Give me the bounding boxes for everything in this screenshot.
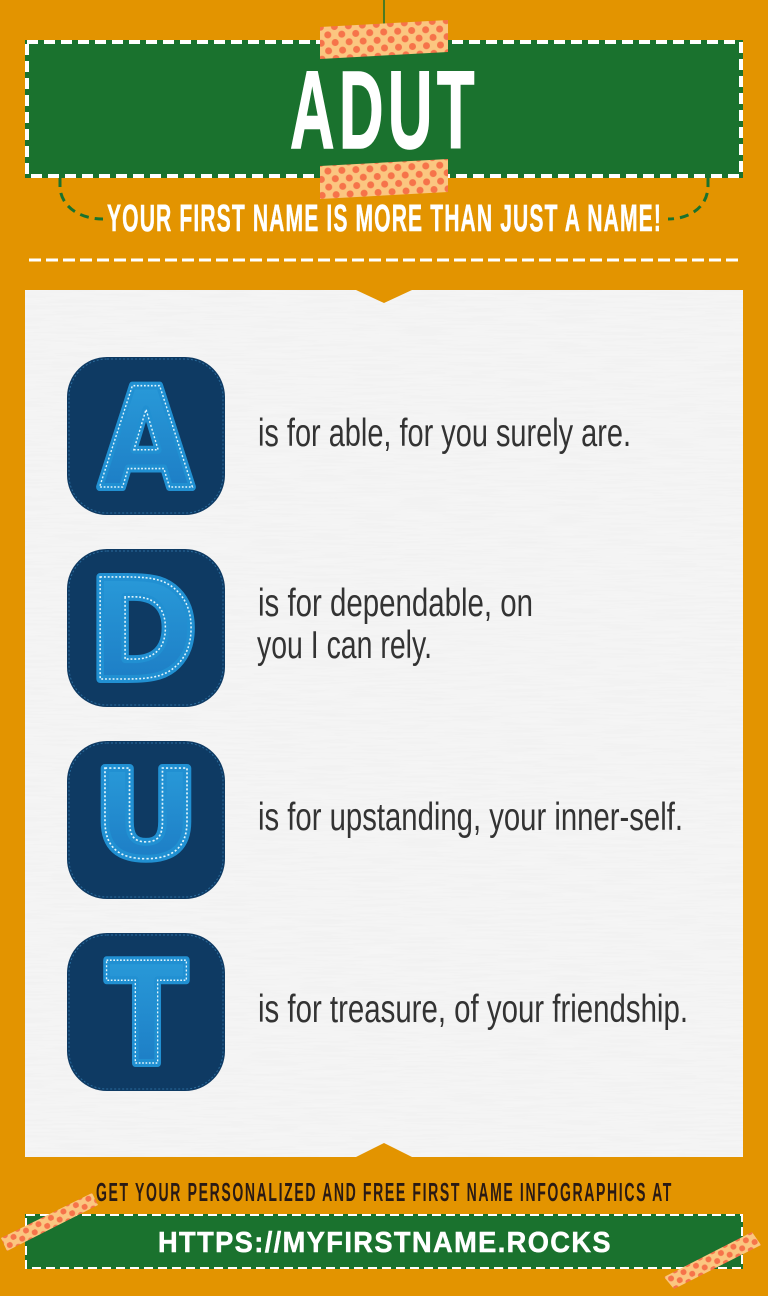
text: D line: is for dependable, on [258, 582, 533, 625]
icon: letter T: T [106, 933, 187, 1097]
icon: letter A: A [99, 358, 193, 520]
icon: letter U [67, 741, 225, 899]
text: A line: is for able, for you surely are. [258, 412, 631, 455]
dashed connector: right [668, 178, 708, 219]
text: D line [257, 582, 533, 667]
top hanging line [383, 0, 385, 24]
notch: top [356, 290, 412, 303]
notch: bottom [356, 1143, 412, 1157]
footer banner [25, 1214, 743, 1269]
tape: footer left [1, 1193, 98, 1251]
icon: letter A [67, 357, 225, 520]
tape: footer right [664, 1232, 761, 1289]
dashed connector: left [60, 178, 103, 219]
header banner [25, 20, 743, 199]
icon: letter U: U [93, 744, 199, 886]
icon: letter D: D [88, 550, 198, 713]
dashed divider [29, 258, 739, 262]
url: HTTPS://MYFIRSTNAME.ROCKS [158, 1227, 612, 1259]
tape: bottom [320, 159, 448, 199]
icon: letter T [67, 933, 225, 1097]
icon: letter D: D [88, 550, 198, 713]
tape: top [320, 20, 448, 59]
icon: letter U: U [93, 744, 199, 886]
panel: acrostic [25, 290, 743, 1157]
icon: letter T: T [106, 933, 187, 1097]
text: D line: you I can rely. [257, 624, 432, 667]
icon: letter A: A [99, 358, 193, 520]
title: ADUT [290, 49, 479, 172]
